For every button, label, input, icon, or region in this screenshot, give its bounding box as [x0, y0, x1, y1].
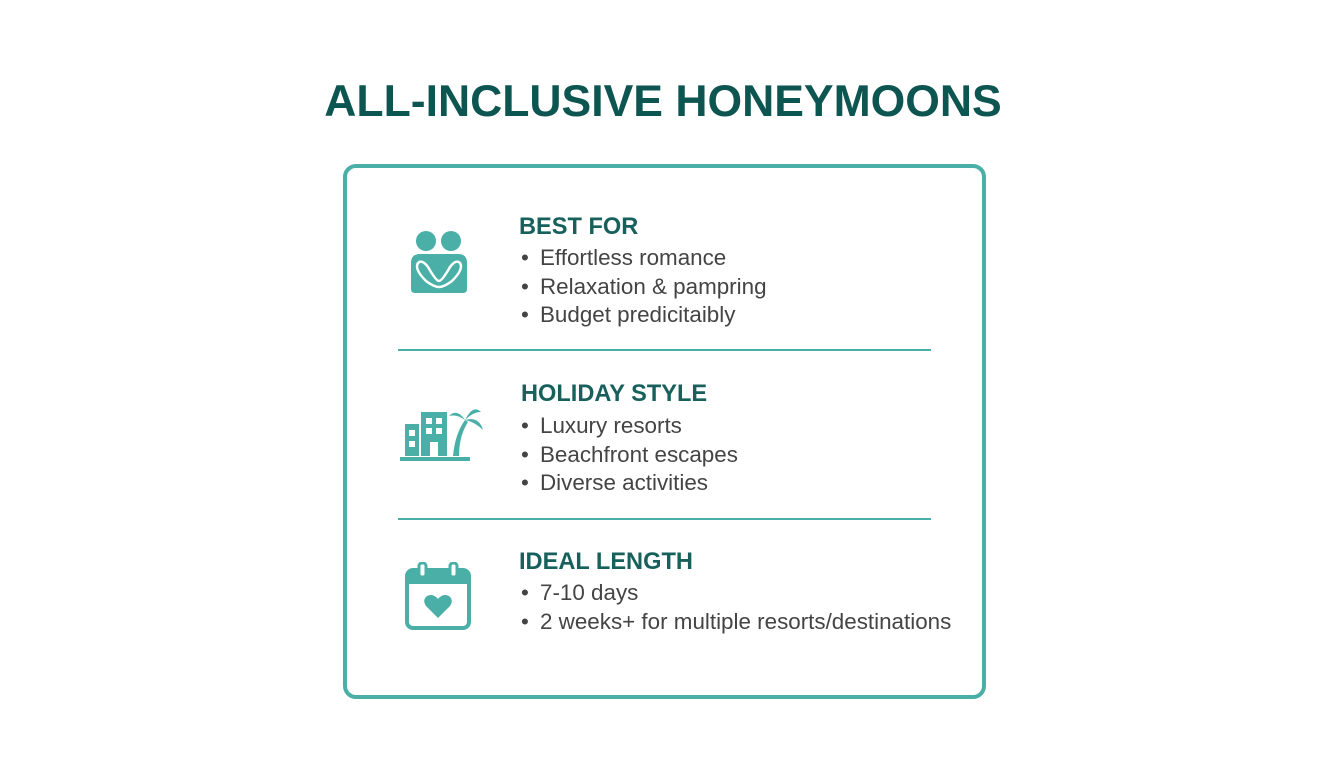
title: ALL-INCLUSIVE HONEYMOONS: [324, 77, 1002, 126]
heading: holiday style: HOLIDAY STYLE: [521, 381, 707, 407]
list: ideal length: •: [521, 608, 529, 634]
list: best for: Effortless romance: [540, 245, 726, 270]
list: holiday style: •: [521, 442, 529, 466]
list: ideal length: [521, 580, 951, 634]
list: ideal length: 7-10 days: [540, 580, 638, 605]
heading: ideal length: IDEAL LENGTH: [519, 549, 693, 575]
icon: calendar: [405, 562, 471, 630]
list: best for: •: [521, 245, 529, 270]
list: holiday style: Beachfront escapes: [540, 442, 738, 466]
list: ideal length: 2 weeks+ for multiple resorts/destinations: [540, 608, 951, 634]
list: best for: Budget predicitaibly: [540, 302, 735, 327]
heading: best for: BEST FOR: [519, 214, 638, 240]
list: best for: Relaxation & pampring: [540, 274, 767, 298]
list: holiday style: •: [521, 413, 529, 438]
list: ideal length: •: [521, 580, 529, 605]
icon: resort: [400, 409, 483, 461]
list: holiday style: Luxury resorts: [540, 413, 682, 438]
list: best for: •: [521, 274, 529, 298]
list: holiday style: [521, 413, 738, 495]
list: best for: [521, 245, 767, 327]
icon: couple: [411, 231, 467, 293]
list: holiday style: •: [521, 470, 529, 495]
list: best for: •: [521, 302, 529, 327]
list: holiday style: Diverse activities: [540, 470, 708, 495]
panel: card: [343, 164, 986, 699]
